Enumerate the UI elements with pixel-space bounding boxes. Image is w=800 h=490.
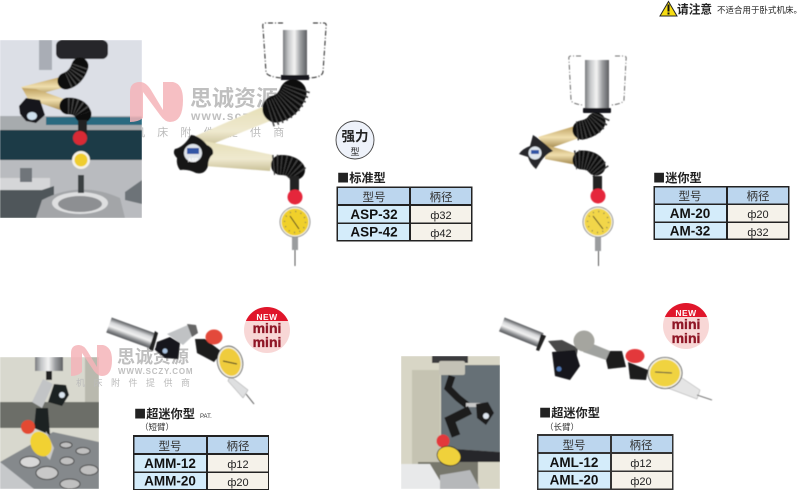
table: mini type: AM-32: [670, 224, 710, 238]
table: super mini long arm: AML-20: [550, 472, 598, 488]
second clamp: [604, 351, 626, 369]
gauge stylus: [697, 395, 712, 400]
lower bellows: [281, 165, 295, 170]
clamp knob: [174, 135, 213, 173]
product: standard type ASP stand: ASP: [188, 158, 199, 164]
table: mini type: 柄径: [746, 190, 770, 203]
badge: strong type: 型: [350, 147, 360, 157]
clamp knob: [552, 350, 580, 380]
table: super mini long arm: ф12: [630, 458, 652, 470]
ball joint: [574, 330, 594, 352]
table: super mini long arm: [537, 434, 674, 490]
red clamp button: [590, 188, 606, 204]
upper arm: [193, 107, 270, 147]
table: standard type: ASP-32: [350, 207, 398, 222]
watermark logo N: [71, 345, 112, 376]
table: standard type: ф42: [430, 228, 452, 240]
shank cylinder: [585, 60, 609, 109]
watermark: lower: [71, 345, 199, 388]
gauge bracket: [290, 176, 299, 196]
table: mini type: [654, 186, 790, 240]
table: super mini short arm: AMM-12: [144, 456, 196, 471]
ball joint arm: [583, 342, 610, 360]
watermark tagline: 机床附件提供商: [76, 377, 199, 388]
gauge body: [228, 376, 248, 398]
badge: new mini mini left: [244, 307, 290, 353]
heading: super mini short arm: [134, 404, 212, 432]
badge: new mini mini left: mini: [253, 320, 281, 336]
heading: super mini short arm: （短臂）: [140, 422, 174, 432]
badge: new mini mini right: mini: [672, 316, 700, 332]
badge: new mini mini right: NEW: [675, 308, 697, 318]
table: mini type: ф20: [747, 209, 769, 221]
dial gauge: [280, 207, 310, 237]
watermark tagline: upper: 机床附件提供商: [134, 125, 296, 139]
table: super mini short arm: [133, 435, 269, 490]
product: standard type ASP stand: [174, 23, 326, 266]
gauge bracket: [593, 176, 602, 191]
shank cylinder: [106, 317, 155, 348]
watermark url: www.sczy.com: [190, 109, 289, 123]
gauge body: [665, 376, 700, 399]
dial gauge: [583, 207, 613, 237]
badge: strong type: [336, 121, 374, 159]
badge: strong type: 强力: [342, 129, 368, 144]
upper bellows: [276, 93, 293, 109]
product: mini type AM stand: [519, 56, 626, 266]
table: super mini short arm: 型号: [158, 439, 182, 453]
clamp knob: [519, 135, 553, 169]
lower bellows: [582, 160, 596, 166]
heading: super mini short arm: ■超迷你型: [134, 404, 195, 422]
watermark: upper: [130, 82, 289, 123]
heading: super mini long arm: ■超迷你型: [539, 403, 600, 421]
warning notice: 请注意: [677, 2, 712, 16]
table: standard type: [336, 186, 472, 242]
dial needle: [655, 372, 672, 373]
table: standard type: ф32: [430, 210, 452, 222]
warning notice: 不适合用于卧式机床。: [717, 5, 800, 15]
table: super mini long arm: AML-12: [550, 455, 598, 470]
table: super mini short arm: 柄径: [226, 440, 250, 453]
red clamp button: [288, 190, 302, 204]
swivel joint: [167, 324, 198, 345]
red clamp button: [206, 330, 222, 344]
upper arm: [538, 126, 579, 149]
warning triangle icon: [660, 2, 677, 16]
shank cylinder: [283, 30, 307, 77]
badge: new mini mini left: NEW: [256, 312, 278, 322]
clamp knob: [155, 337, 180, 359]
watermark url: WWW.SCZY.COM: [118, 367, 193, 376]
badge: new mini mini right: [663, 303, 709, 349]
table: super mini short arm: ф20: [227, 477, 249, 489]
shank cylinder: [499, 318, 544, 347]
dial gauge: [214, 343, 246, 381]
table: mini type: AM-20: [670, 206, 710, 221]
heading: standard type: ■标准型: [337, 168, 386, 186]
table: standard type: ASP-42: [350, 224, 398, 240]
badge: new mini mini right: mini: [672, 330, 700, 346]
photo: super mini short arm on workpiece: [0, 357, 99, 489]
badge: new mini mini left: mini: [253, 334, 281, 350]
heading: mini type: ■迷你型: [653, 168, 702, 186]
table: mini type: ф32: [747, 227, 769, 239]
dial gauge: [648, 358, 682, 388]
table: super mini long arm: 柄径: [630, 439, 652, 452]
table: standard type: 型号: [362, 190, 386, 204]
table: super mini short arm: ф12: [227, 459, 249, 471]
gauge stylus: [595, 237, 601, 251]
gauge stylus: [292, 237, 298, 250]
dashed holder outline: [569, 56, 626, 105]
red clamp button: [626, 349, 644, 363]
lower arm: [205, 141, 273, 171]
gauge clamp: [195, 339, 222, 362]
table: super mini long arm: 型号: [562, 438, 586, 452]
warning notice: [660, 2, 800, 16]
photo: super mini long arm on machine: [401, 356, 500, 489]
watermark logo N: [130, 82, 183, 122]
table: super mini short arm: AMM-20: [144, 474, 196, 488]
dial needle: [223, 361, 237, 364]
lower arm: [545, 145, 578, 165]
product: super mini long arm AML: [499, 318, 712, 400]
heading: super mini long arm: [539, 403, 600, 432]
table: super mini long arm: ф20: [630, 476, 652, 488]
heading: super mini short arm: PAT.: [200, 414, 212, 420]
dashed holder outline: [263, 23, 326, 78]
watermark name: 思诚资源: [117, 346, 189, 367]
upper bellows: [582, 122, 596, 130]
product: super mini short arm AMM: [106, 317, 254, 404]
table: standard type: 柄径: [430, 191, 452, 204]
photo: standard stand mounted on machine spindle: [0, 40, 142, 218]
gauge stylus: [246, 394, 254, 404]
watermark name: 思诚资源: [190, 86, 278, 111]
table: mini type: 型号: [678, 189, 702, 203]
heading: super mini long arm: （长臂）: [545, 422, 579, 432]
